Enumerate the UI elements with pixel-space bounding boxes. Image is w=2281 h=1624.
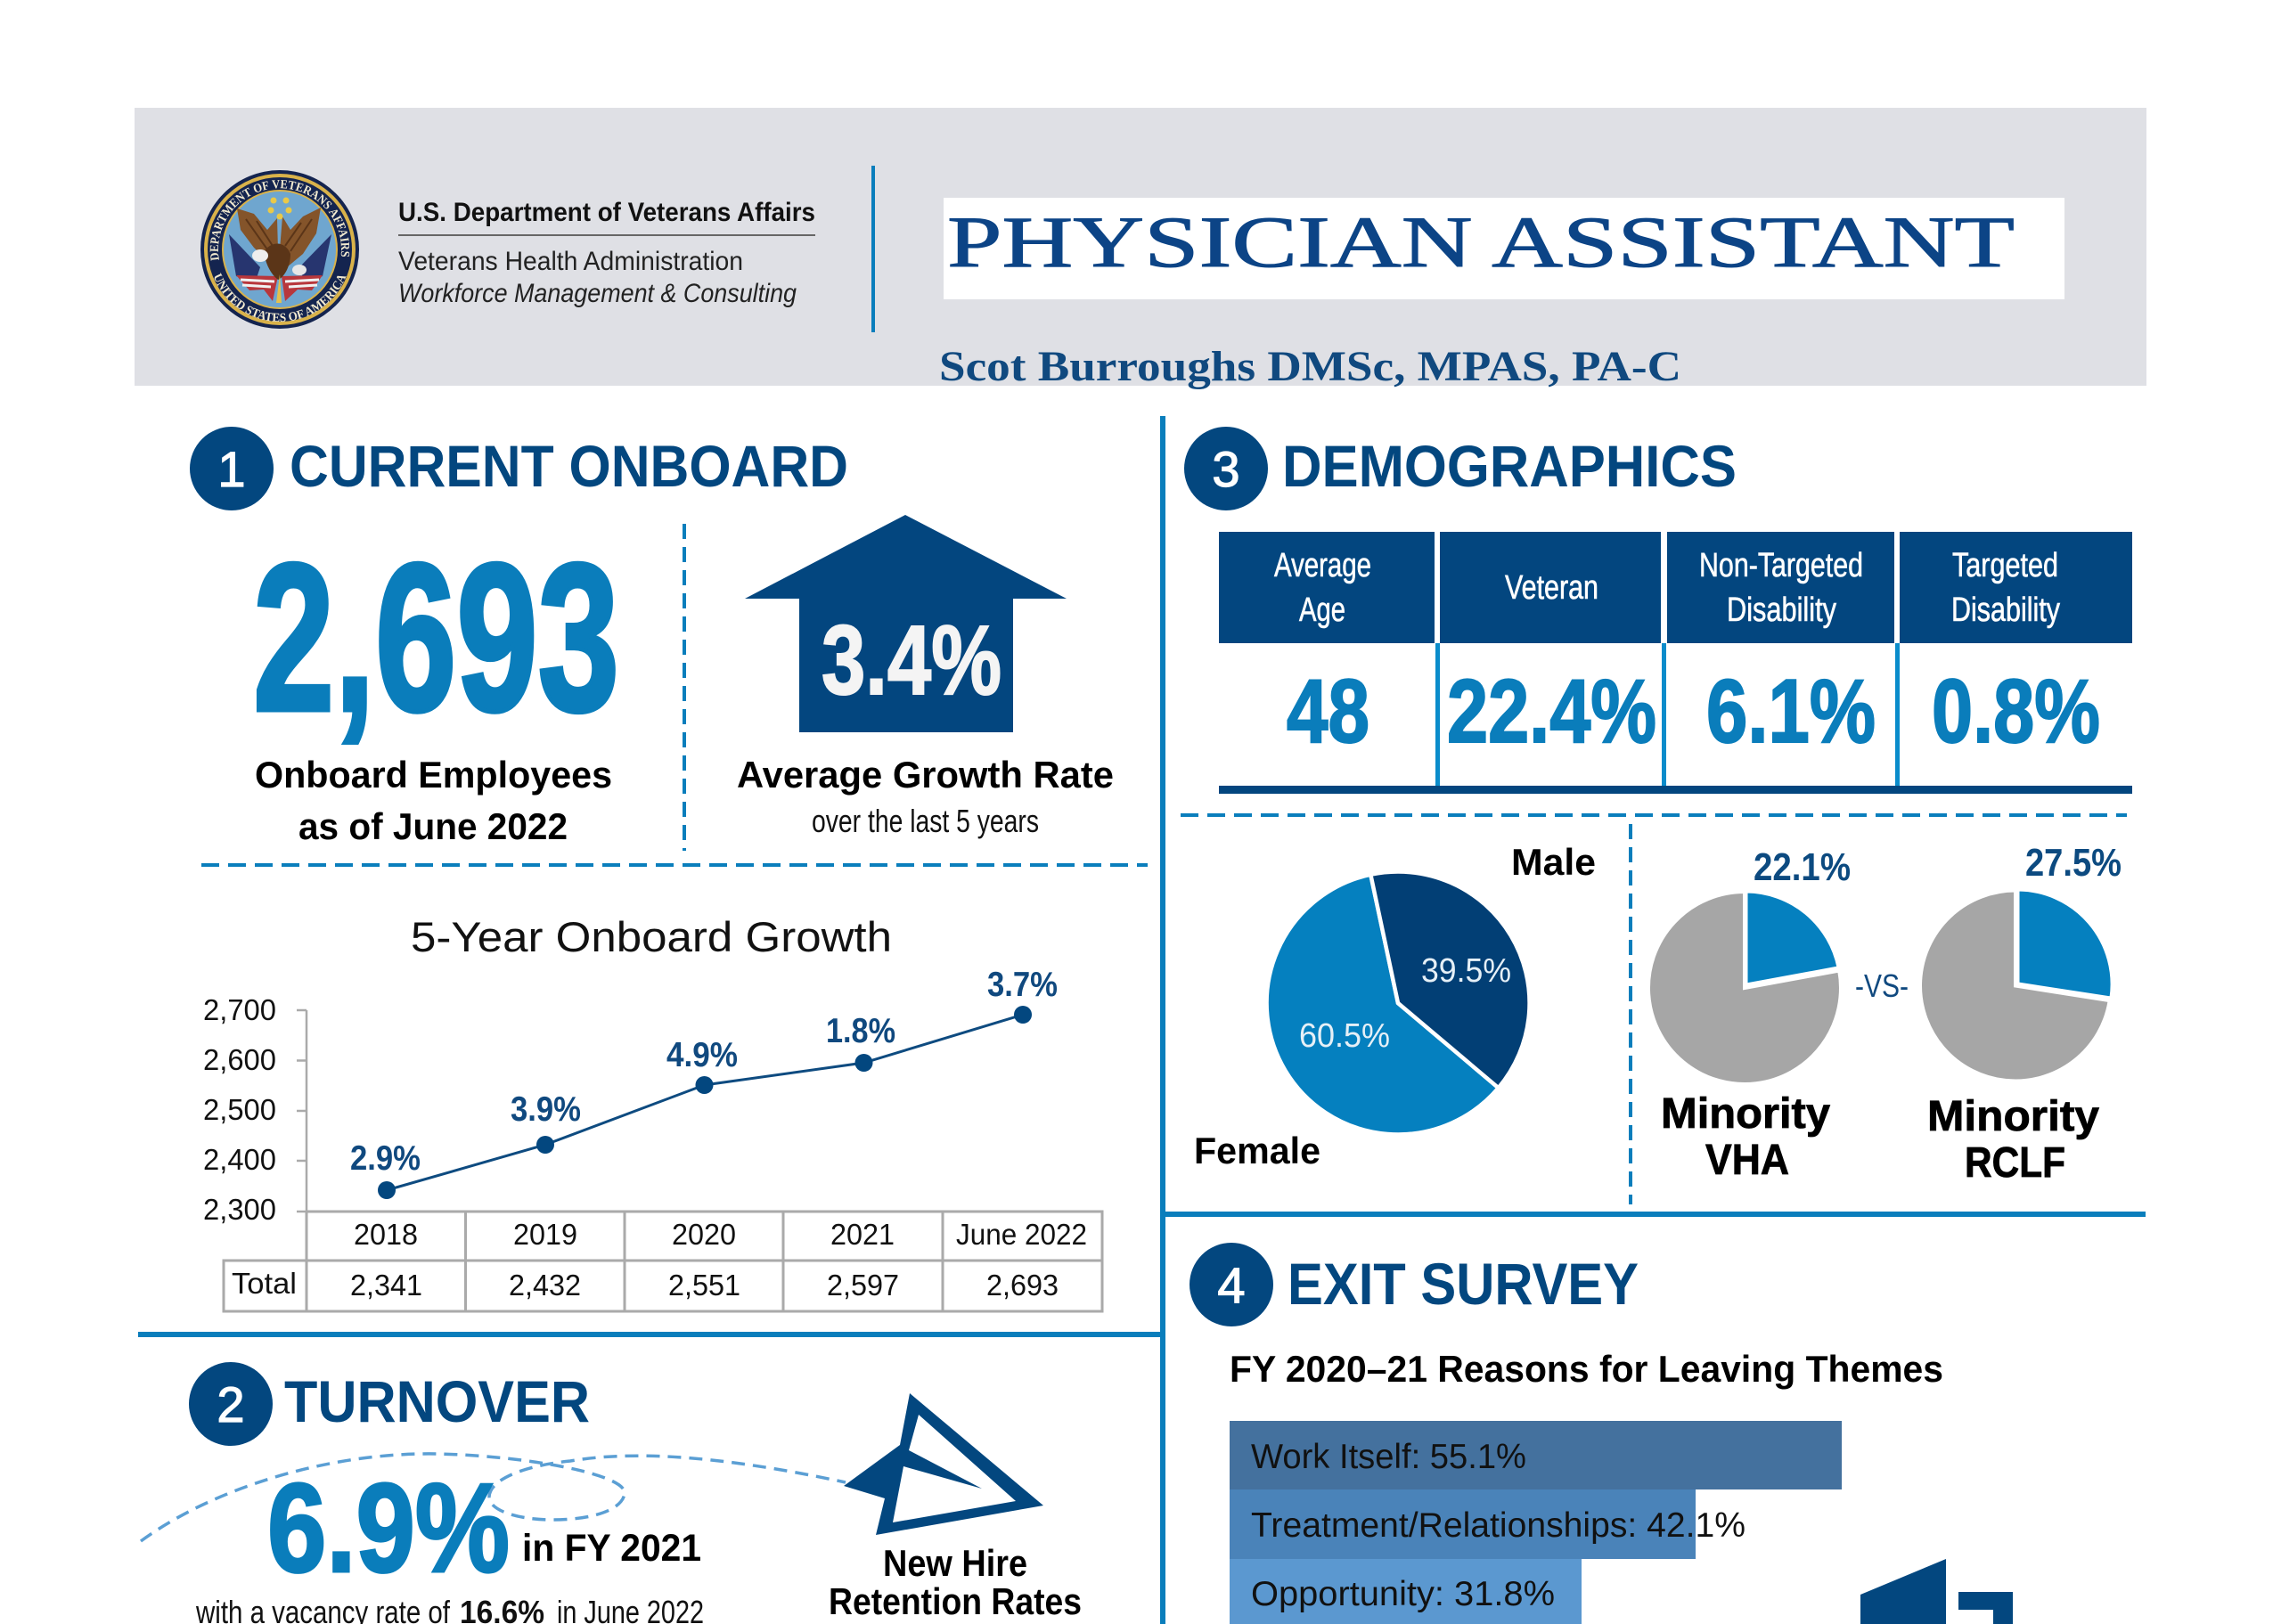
demographics table: Disability: [1727, 592, 1836, 629]
title: PHYSICIAN ASSISTANT: [947, 201, 2015, 282]
data table: 2,597: [827, 1269, 899, 1302]
growth caption: [737, 754, 1114, 839]
turnover figure: [267, 1457, 701, 1599]
heading: demographics: 3: [1212, 441, 1240, 497]
data table: Total: [232, 1267, 297, 1300]
panel: demographics: [1181, 427, 2132, 1204]
onboard caption: [255, 754, 612, 847]
data table: 2020: [672, 1218, 736, 1251]
demographics table: 22.4%: [1447, 662, 1656, 762]
organization text: Veterans Health Administration: [398, 247, 743, 276]
demographics table: 48: [1287, 662, 1369, 762]
minority VHA pie chart: VHA: [1705, 1137, 1789, 1184]
minority VHA pie chart: Minority: [1661, 1090, 1830, 1138]
icon: growth arrow: [745, 515, 1067, 732]
line chart: 1.8%: [826, 1012, 895, 1050]
onboard caption: Onboard Employees: [255, 754, 612, 796]
icon: VA seal: [200, 170, 359, 329]
heading: exit survey: [1190, 1243, 1639, 1326]
turnover figure: 6.9%: [267, 1457, 510, 1599]
gender pie chart: [1194, 841, 1596, 1171]
gender pie chart: 39.5%: [1421, 952, 1511, 990]
vacancy rate text: [195, 1594, 704, 1624]
minority RCLF pie chart: RCLF: [1965, 1139, 2065, 1187]
line chart: 2,700: [203, 993, 276, 1026]
demographics table: Targeted: [1952, 547, 2058, 584]
demographics table: Non-Targeted: [1699, 547, 1863, 584]
panel: exit survey: [1190, 1243, 2013, 1624]
heading: turnover: 2: [217, 1376, 245, 1432]
data table: June 2022: [956, 1218, 1087, 1251]
data table: 2021: [830, 1218, 895, 1251]
heading: exit survey: 4: [1217, 1257, 1246, 1313]
minority VHA pie chart: 22.1%: [1754, 845, 1851, 889]
minority RCLF pie chart: 27.5%: [2025, 841, 2122, 885]
heading: demographics: DEMOGRAPHICS: [1282, 433, 1737, 499]
organization text: Workforce Management & Consulting: [398, 279, 797, 308]
heading: exit survey: EXIT SURVEY: [1288, 1251, 1639, 1317]
icon: VA seal: UNITED STATES OF AMERICA: [214, 273, 346, 322]
gender pie chart: Female: [1194, 1130, 1320, 1171]
growth caption: over the last 5 years: [812, 803, 1039, 839]
demographics table: Veteran: [1505, 569, 1598, 607]
retention label: New Hire: [883, 1542, 1027, 1584]
data table: 2,432: [509, 1269, 581, 1302]
data table: 2018: [354, 1218, 418, 1251]
heading: current onboard: [190, 427, 848, 510]
bar chart: reasons for leaving: Treatment/Relationships: 42.1%: [1251, 1506, 1745, 1545]
onboard caption: as of June 2022: [298, 805, 568, 847]
line chart: 2.9%: [350, 1139, 421, 1178]
organization text: [398, 198, 815, 308]
data table: 2,551: [668, 1269, 740, 1302]
data table: 2,693: [986, 1269, 1059, 1302]
demographics table: 6.1%: [1706, 662, 1876, 762]
line chart: 3.7%: [987, 966, 1058, 1004]
demographics table: 0.8%: [1932, 662, 2100, 762]
growth caption: Average Growth Rate: [737, 754, 1114, 796]
line chart: 2,400: [203, 1143, 276, 1176]
minority RCLF pie chart: [1920, 841, 2122, 1187]
line chart: 2,600: [203, 1043, 276, 1076]
chart title: 5-Year Onboard Growth: [411, 913, 892, 960]
exit survey subtitle: FY 2020–21 Reasons for Leaving Themes: [1230, 1348, 1943, 1390]
author name: Scot Burroughs DMSc, MPAS, PA-C: [939, 343, 1681, 390]
icon: exit door: [1860, 1559, 2013, 1624]
demographics table: Average: [1274, 547, 1371, 584]
turnover figure: in FY 2021: [522, 1527, 701, 1570]
line chart: 3.9%: [511, 1090, 581, 1129]
heading: turnover: [189, 1362, 590, 1446]
bar chart: reasons for leaving: Work Itself: 55.1%: [1251, 1438, 1526, 1476]
organization text: U.S. Department of Veterans Affairs: [398, 198, 815, 227]
icon: VA seal: DEPARTMENT OF VETERANS AFFAIRS: [210, 180, 349, 261]
bar chart: reasons for leaving: [1230, 1421, 1842, 1624]
retention label: Retention Rates: [829, 1580, 1082, 1622]
minority RCLF pie chart: Minority: [1927, 1093, 2099, 1140]
heading: demographics: [1184, 427, 1737, 510]
heading: current onboard: 1: [217, 441, 246, 497]
data table: 2,341: [350, 1269, 422, 1302]
big number: 2,693: [253, 520, 619, 755]
line chart: 2,300: [203, 1193, 276, 1226]
heading: current onboard: CURRENT ONBOARD: [290, 433, 848, 499]
panel: current onboard: [190, 427, 1148, 1311]
data table: 2019: [513, 1218, 577, 1251]
panel: turnover: [141, 1362, 1082, 1624]
header band: [135, 108, 2146, 390]
bar chart: reasons for leaving: Opportunity: 31.8%: [1251, 1575, 1555, 1613]
line chart: [203, 966, 1058, 1226]
icon: growth arrow: 3.4%: [822, 606, 1002, 715]
demographics table: Age: [1299, 592, 1345, 629]
line chart: 2,500: [203, 1093, 276, 1126]
gender pie chart: Male: [1511, 841, 1596, 883]
title: [944, 198, 2064, 299]
demographics table: Disability: [1951, 592, 2060, 629]
versus label: -VS-: [1855, 967, 1909, 1004]
heading: turnover: TURNOVER: [284, 1368, 590, 1434]
gender pie chart: 60.5%: [1299, 1017, 1390, 1055]
retention label: [829, 1542, 1082, 1622]
line chart: 4.9%: [666, 1036, 738, 1074]
dashed flight path: [141, 1454, 846, 1541]
data table: [224, 1212, 1102, 1311]
minority VHA pie chart: [1648, 845, 1851, 1184]
demographics table: [1219, 532, 2132, 794]
icon: paper plane: [844, 1393, 1043, 1535]
